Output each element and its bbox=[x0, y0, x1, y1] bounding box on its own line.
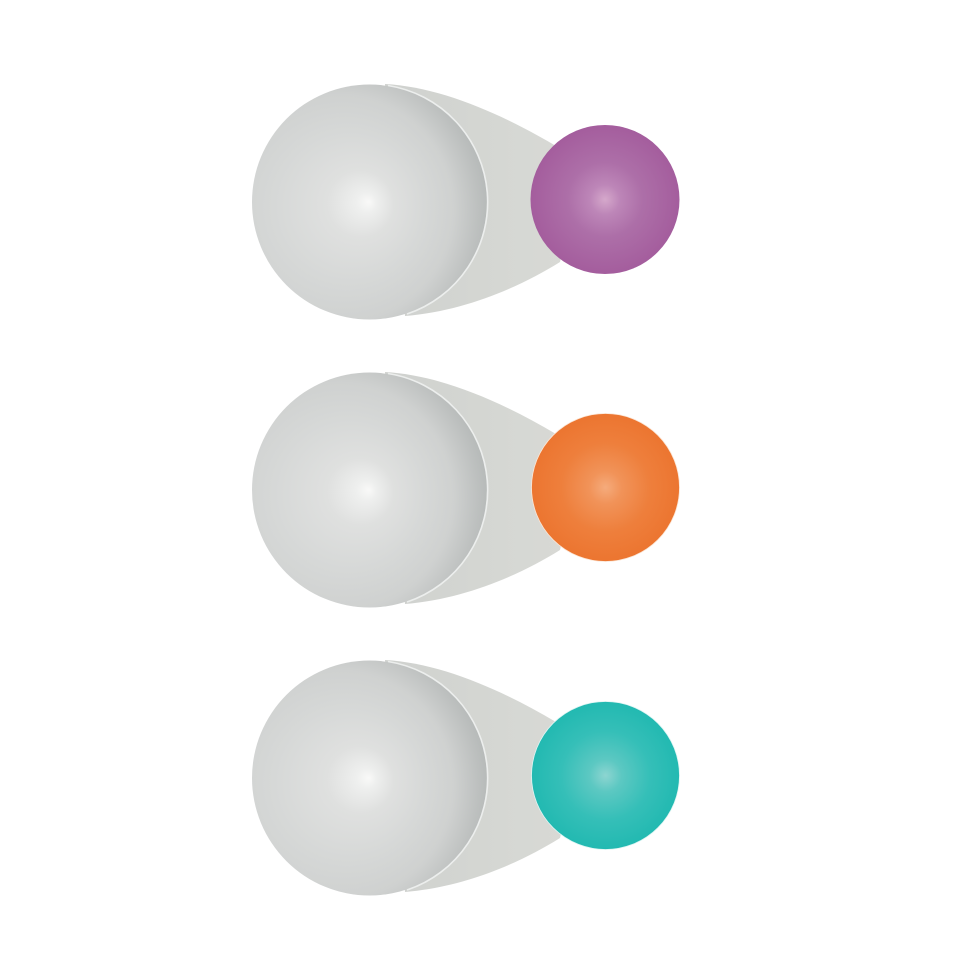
connector cone bbox=[385, 660, 575, 892]
large grey sphere bbox=[252, 372, 487, 608]
group: teal unit bbox=[252, 660, 680, 896]
large grey sphere bbox=[252, 84, 487, 320]
connector cone bbox=[385, 372, 575, 604]
group: purple unit bbox=[252, 84, 680, 320]
teal sphere bbox=[532, 702, 680, 850]
rim highlight bbox=[388, 86, 488, 314]
rim highlight bbox=[388, 662, 488, 890]
purple sphere bbox=[530, 125, 680, 274]
connector cone bbox=[385, 84, 575, 316]
large grey sphere bbox=[252, 660, 487, 896]
rim highlight bbox=[388, 374, 488, 602]
orange sphere bbox=[532, 414, 680, 562]
group: orange unit bbox=[252, 372, 680, 608]
